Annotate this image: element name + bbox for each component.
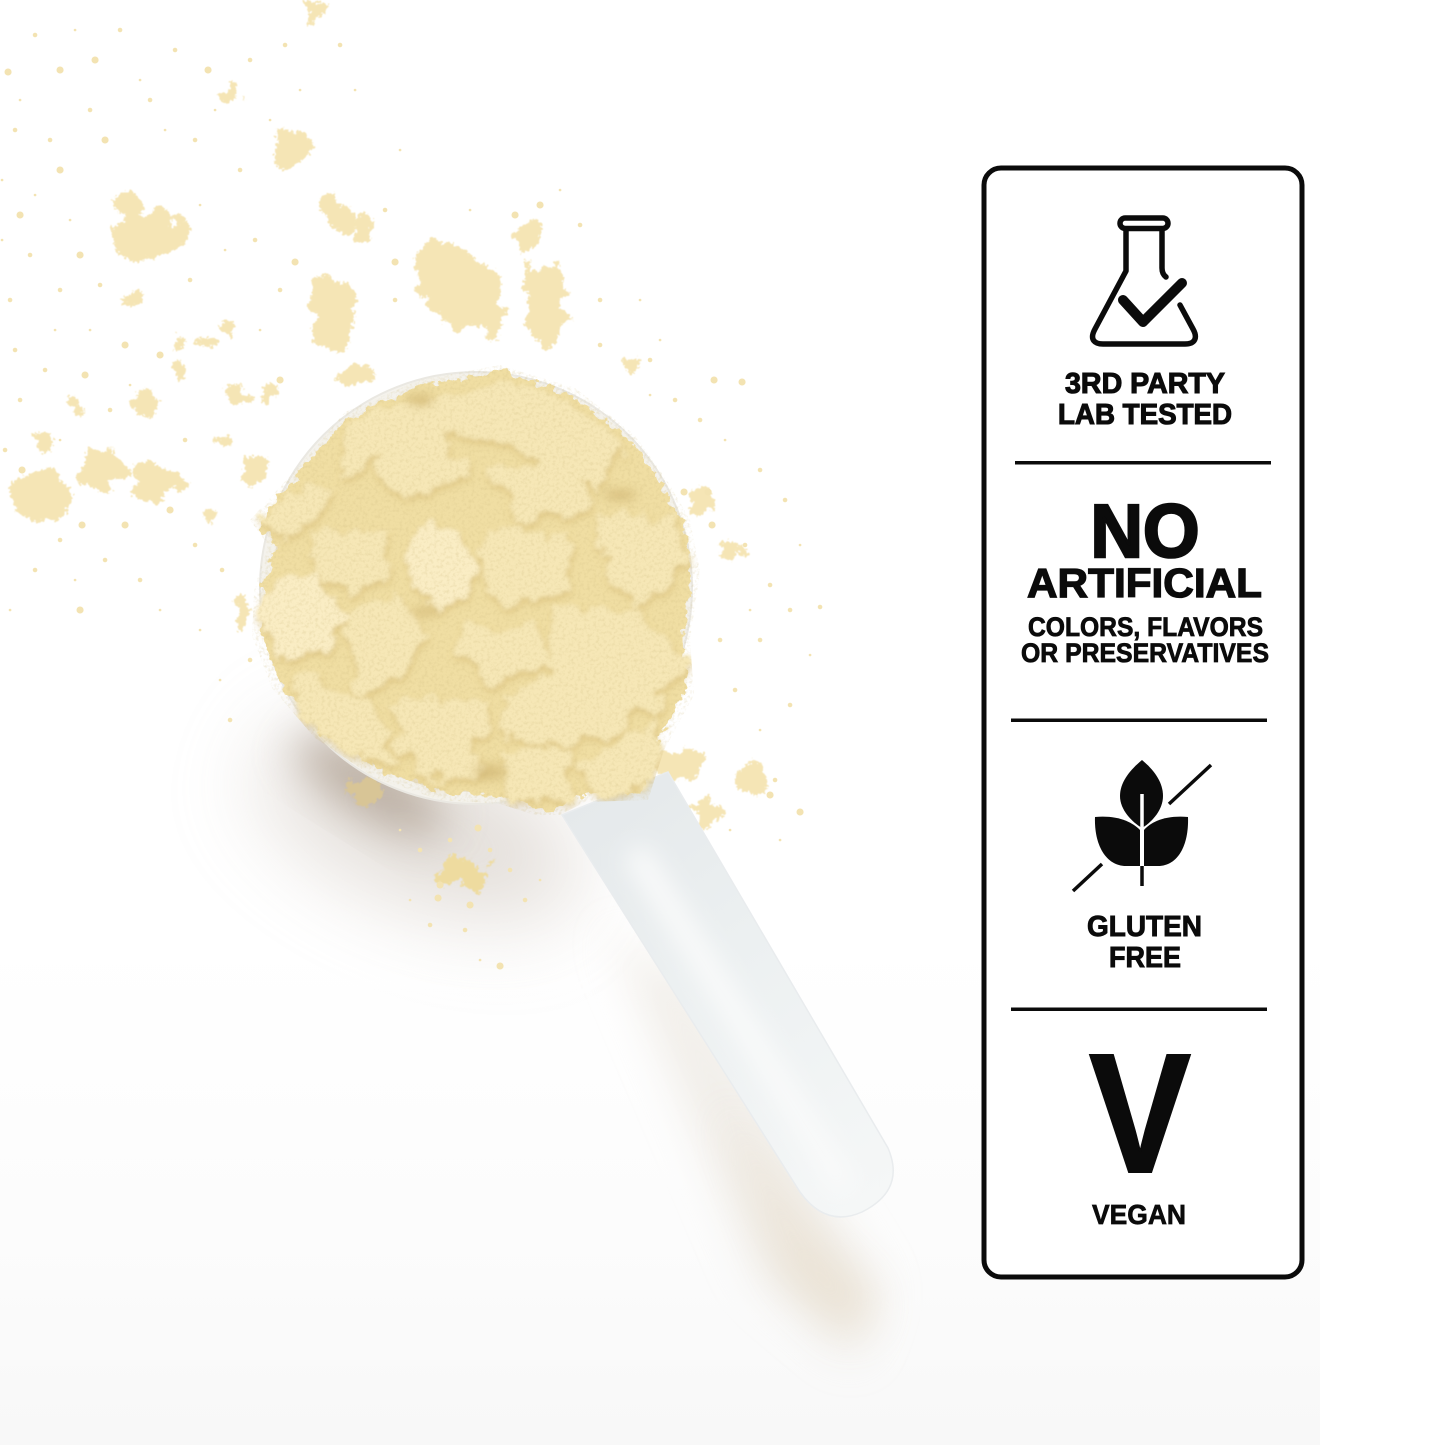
label: no artificial xyxy=(1021,489,1269,668)
icon: lab flask with check xyxy=(1093,218,1195,344)
label: no artificial: ARTIFICIAL xyxy=(1027,560,1262,606)
scoop cast shadow xyxy=(232,687,880,1360)
powder mound xyxy=(250,365,700,815)
label: 3rd party lab tested: 3RD PARTY xyxy=(1065,368,1225,400)
label: vegan: VEGAN xyxy=(1092,1199,1186,1230)
scattered powder crumbs xyxy=(9,0,764,887)
fine powder specks xyxy=(2,30,820,966)
label: no artificial: OR PRESERVATIVES xyxy=(1021,638,1269,668)
icon: crossed out wheat leaf xyxy=(1073,760,1211,891)
divider xyxy=(1011,718,1267,722)
powder clumps xyxy=(257,380,690,800)
powder crevice shading xyxy=(406,394,636,780)
measuring scoop xyxy=(260,372,893,1217)
divider xyxy=(1011,1008,1267,1011)
label: 3rd party lab tested xyxy=(1058,368,1232,431)
label: gluten free: GLUTEN xyxy=(1087,911,1202,943)
panel: product claims xyxy=(984,168,1302,1277)
scoop handle xyxy=(562,772,893,1217)
icon: letter V: V xyxy=(1089,1019,1191,1209)
label: 3rd party lab tested: LAB TESTED xyxy=(1058,399,1232,431)
label: no artificial: NO xyxy=(1090,489,1200,573)
label: gluten free xyxy=(1087,911,1202,974)
divider xyxy=(1015,461,1271,464)
label: gluten free: FREE xyxy=(1109,942,1181,974)
scoop bowl xyxy=(260,372,692,804)
label: no artificial: COLORS, FLAVORS xyxy=(1028,612,1263,642)
